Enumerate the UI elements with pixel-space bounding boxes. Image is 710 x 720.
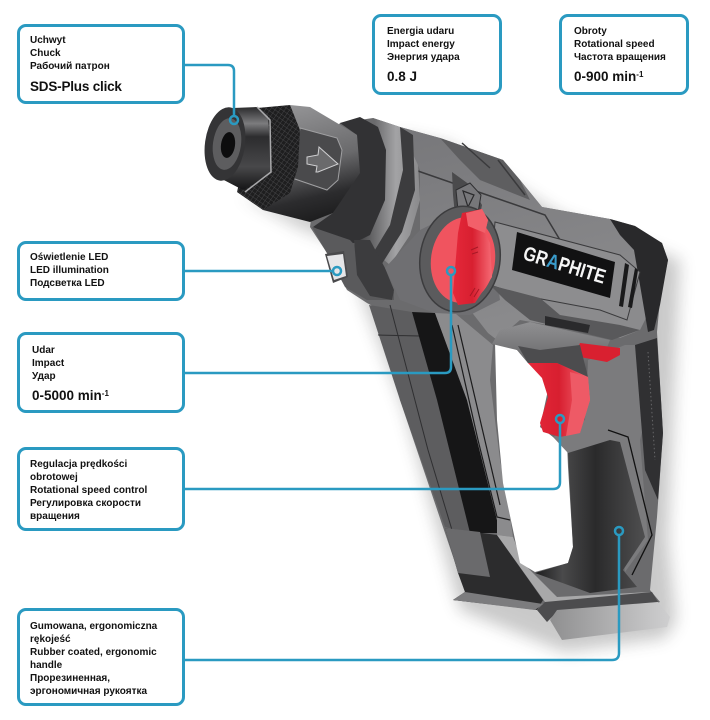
- knurled ring: [237, 105, 300, 210]
- rotational speed labels: Rotational speed: [574, 39, 655, 50]
- speed control labels: Rotational speed control: [30, 485, 147, 496]
- impact energy labels: Impact energy: [387, 39, 455, 50]
- neck top dark: [452, 172, 482, 215]
- dial handle: [453, 209, 492, 305]
- main body: [310, 117, 668, 620]
- rotational speed labels: Частота вращения: [574, 52, 666, 63]
- chuck hole: [219, 131, 237, 159]
- chuck value: SDS-Plus click: [30, 79, 122, 94]
- connector: speed control: [183, 415, 564, 489]
- rotational speed labels: Obroty: [574, 26, 607, 37]
- LED labels: Подсветка LED: [30, 278, 105, 289]
- chuck labels: [30, 35, 110, 72]
- grip labels: Gumowana, ergonomiczna: [30, 621, 157, 632]
- lower front housing: [312, 227, 394, 300]
- rear housing: [400, 127, 655, 340]
- chuck: [200, 105, 360, 222]
- drop shadow: [240, 135, 680, 652]
- grip labels: [30, 621, 158, 697]
- connector: chuck: [183, 65, 238, 124]
- impact energy labels: Energia udaru: [387, 26, 454, 37]
- grip labels: Rubber coated, ergonomic: [30, 647, 157, 658]
- chuck labels: Рабочий патрон: [30, 61, 110, 72]
- foot dark part: [445, 528, 543, 610]
- impact energy labels: Энергия удара: [387, 52, 460, 63]
- panel: impact: [17, 332, 185, 413]
- nose face: [200, 105, 250, 183]
- forward/reverse button: [577, 343, 620, 362]
- dial neck: [385, 220, 500, 315]
- LED labels: LED illumination: [30, 265, 109, 276]
- arrow plate: [292, 128, 342, 190]
- light ring on nose: [245, 107, 271, 192]
- vents: [619, 263, 638, 308]
- column light strip: [435, 313, 513, 537]
- foot light strip: [497, 535, 652, 602]
- connector: grip: [183, 527, 623, 660]
- panel: speed control: [17, 447, 185, 531]
- panel: chuck: [17, 24, 185, 104]
- dark stripe behind light band: [370, 127, 415, 270]
- grip labels: handle: [30, 660, 62, 671]
- logo wordmark: GRAPHITE: [521, 243, 608, 289]
- impact energy labels: [387, 26, 460, 63]
- speed control labels: obrotowej: [30, 472, 78, 483]
- impact value: 0-5000 min-1: [32, 388, 109, 403]
- grip labels: rękojeść: [30, 634, 71, 645]
- housing silhouette: [310, 118, 668, 620]
- speed control labels: вращения: [30, 511, 80, 522]
- upper opening shading: [492, 322, 610, 378]
- column black strip: [412, 312, 498, 533]
- impact labels: [32, 345, 64, 382]
- LED lamp: [325, 251, 348, 283]
- rear handle: [553, 345, 650, 572]
- rubber grip: [535, 440, 645, 593]
- column left strip: [369, 305, 470, 533]
- rotational speed labels: [574, 26, 666, 63]
- chuck labels: Uchwyt: [30, 35, 66, 46]
- trigger opening: [495, 342, 573, 572]
- chuck labels: Chuck: [30, 48, 61, 59]
- logo plate: [512, 232, 615, 298]
- panel: rotational speed: [559, 14, 689, 95]
- panel: LED: [17, 241, 185, 301]
- LED labels: Oświetlenie LED: [30, 252, 108, 263]
- top ribs: [440, 138, 530, 200]
- grip labels: Прорезиненная,: [30, 673, 110, 684]
- panel: impact energy: [372, 14, 502, 95]
- nose cylinder: [220, 107, 272, 190]
- panel: grip: [17, 608, 185, 706]
- icon: arrow: [307, 147, 338, 172]
- trigger: [518, 345, 590, 437]
- logo surround strip: [490, 222, 640, 320]
- impact energy value: 0.8 J: [387, 69, 417, 84]
- impact labels: Impact: [32, 358, 64, 369]
- speed control labels: Регулировка скорости: [30, 498, 141, 509]
- triangle mark: [463, 191, 474, 207]
- speed control labels: Regulacja prędkości: [30, 459, 127, 470]
- connector: LED: [183, 267, 341, 275]
- impact labels: Удар: [32, 371, 56, 382]
- rear cap: [610, 219, 668, 332]
- rotary dial: [413, 201, 507, 317]
- connector: impact: [183, 267, 455, 373]
- base plate: [453, 592, 670, 640]
- barrel: [263, 105, 360, 222]
- bands behind barrel: [360, 118, 420, 265]
- speed control labels: [30, 459, 147, 522]
- rear ribbed grip: [635, 338, 663, 500]
- grip labels: эргономичная рукоятка: [30, 686, 147, 697]
- rotational speed value: 0-900 min-1: [574, 69, 643, 84]
- impact labels: Udar: [32, 345, 55, 356]
- LED labels: [30, 252, 109, 289]
